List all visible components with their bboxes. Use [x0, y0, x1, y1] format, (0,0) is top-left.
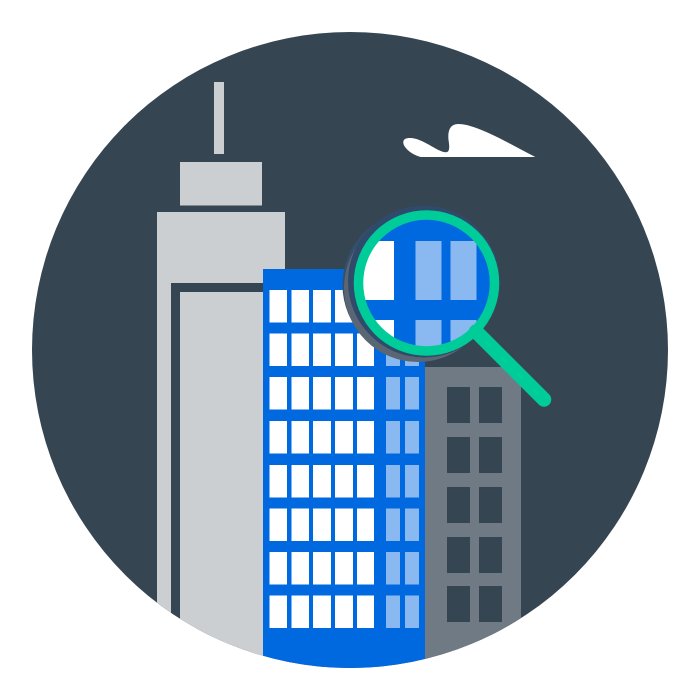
magnifier handle [476, 332, 544, 400]
magnifier shadow [342, 206, 500, 362]
grey building [425, 367, 521, 677]
white windows [270, 290, 374, 628]
magnifier ring [358, 215, 494, 351]
outer shadow edge [342, 210, 492, 360]
light blue windows [386, 334, 419, 628]
enlarged white windows [363, 241, 394, 300]
grey building body [425, 367, 521, 677]
blue shadow band [348, 206, 500, 358]
tower cap [180, 162, 262, 206]
tower antenna [214, 82, 224, 154]
magnifier lens view [363, 220, 490, 346]
grey building windows [447, 387, 502, 622]
blue building body [263, 269, 425, 679]
tower inset line [171, 283, 263, 618]
lens background [366, 220, 490, 346]
enlarged light windows [416, 241, 476, 346]
grey shadow band [344, 214, 492, 362]
blue building [263, 269, 425, 679]
tall grey tower [157, 82, 285, 682]
tower body [157, 212, 285, 682]
icon: cloud [403, 124, 535, 157]
